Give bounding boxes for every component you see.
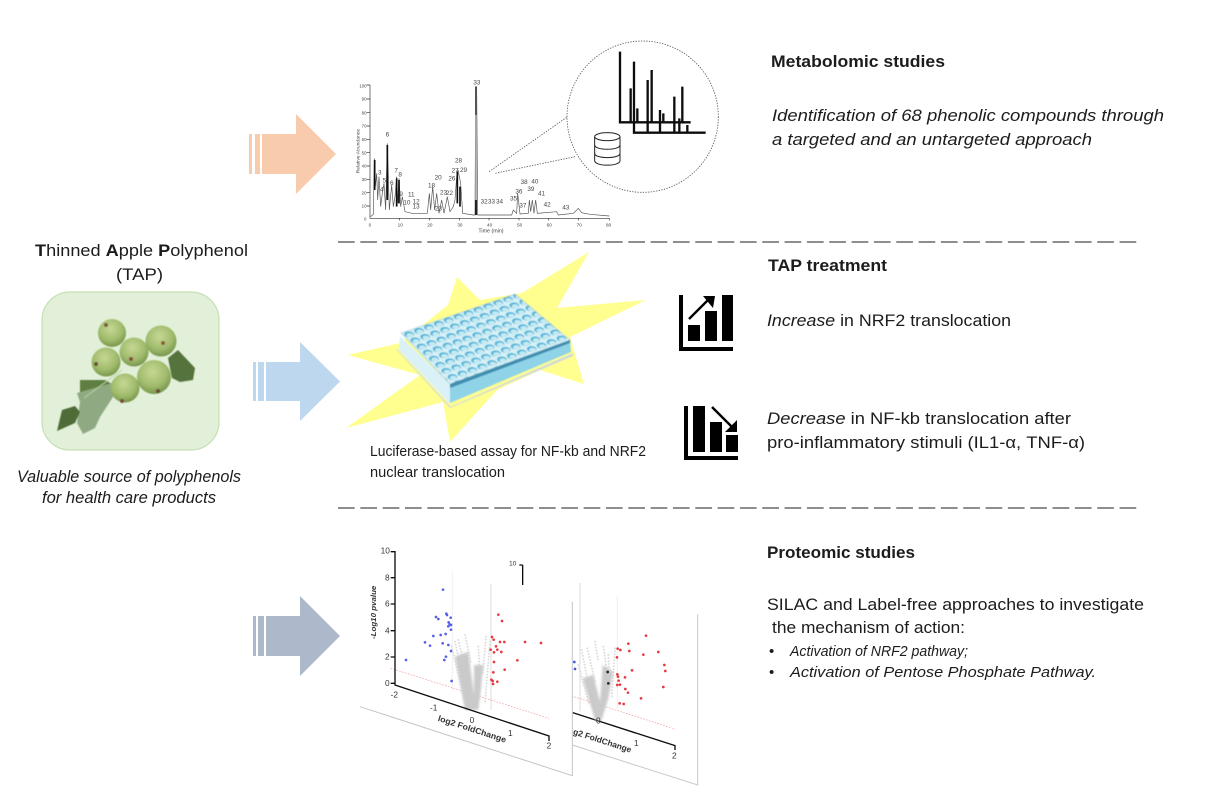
caption: valuable source: for health care products <box>42 489 216 507</box>
chart: front volcano plot: 8 <box>385 572 390 582</box>
chart: chromatogram: 12 <box>413 198 420 205</box>
chart: chromatogram: 20 <box>427 223 433 228</box>
text: TAP treatment: pro-inflammatory stimuli (IL1-α, TNF-α) <box>767 434 1085 452</box>
chart: chromatogram: Relative Abundance <box>355 129 361 173</box>
chart: chromatogram: 13 <box>413 204 420 211</box>
chart: chromatogram: 9 <box>399 191 403 198</box>
icon: yellow burst <box>346 252 646 442</box>
chart: chromatogram: 50 <box>517 223 523 228</box>
chart: front volcano plot: 2 <box>385 652 390 662</box>
chart: chromatogram: 33 <box>473 79 481 86</box>
text: proteomic studies: • <box>769 664 774 681</box>
chart: chromatogram: 28 <box>455 157 463 164</box>
chart: chromatogram: 7 <box>394 168 398 175</box>
caption: valuable source: Valuable source of polyphenols <box>17 468 241 486</box>
chart: front volcano plot: 2 <box>547 740 552 750</box>
caption: luciferase assay: Luciferase-based assay for NF-kb and NRF2 <box>370 443 646 460</box>
chart: chromatogram: 70 <box>362 124 367 129</box>
chart: chromatogram: 80 <box>362 110 367 115</box>
chart: front volcano plot: 4 <box>385 625 390 635</box>
chart: front volcano plot: -2 <box>391 690 398 700</box>
chart: chromatogram: 0 <box>369 223 372 228</box>
text: proteomic studies: • <box>769 643 774 660</box>
chart: chromatogram: 23 <box>440 190 448 197</box>
chart: chromatogram: 35 <box>510 196 518 203</box>
chart: chromatogram: 10 <box>362 204 367 209</box>
text: proteomic studies: SILAC and Label-free approaches to investigate <box>767 596 1144 614</box>
chart: front volcano plot <box>360 535 572 776</box>
divider top <box>338 241 1137 243</box>
icon: database <box>595 133 620 165</box>
chart: chromatogram: 33 <box>488 199 496 206</box>
icon: falling bar chart <box>684 406 738 460</box>
text: proteomic studies <box>767 544 1144 681</box>
chart: chromatogram: 4 <box>380 186 384 193</box>
chart: chromatogram: 6 <box>386 131 390 138</box>
chart: back volcano plot: 10 <box>509 561 517 568</box>
chart: chromatogram: 100 <box>359 83 367 88</box>
chart: chromatogram: 50 <box>362 150 367 155</box>
icon: rising bar chart <box>679 295 733 351</box>
chart: chromatogram: Time (min) <box>478 229 504 235</box>
chart: chromatogram: 39 <box>527 186 535 193</box>
chart: front volcano plot: 6 <box>385 599 390 609</box>
chart: chromatogram: 3 <box>378 170 382 177</box>
arrow: orange <box>249 114 336 194</box>
text: proteomic studies: Proteomic studies <box>767 544 915 562</box>
text: metabolomic studies: Identification of 68 phenolic compounds through <box>772 107 1164 125</box>
chart: chromatogram: 40 <box>531 178 539 185</box>
chart: chromatogram: 20 <box>362 190 367 195</box>
chart: chromatogram: 34 <box>496 199 504 206</box>
text: TAP treatment: TAP treatment <box>768 257 888 275</box>
chart: chromatogram: 6 <box>390 180 394 187</box>
icon: apple cluster <box>57 319 195 434</box>
chart: chromatogram: 0 <box>364 217 367 222</box>
chart: chromatogram: 29 <box>460 167 468 174</box>
chart: chromatogram: 42 <box>544 202 551 209</box>
chart: chromatogram: 40 <box>487 223 493 228</box>
chart: chromatogram: 11 <box>408 191 415 198</box>
chart: chromatogram: 22 <box>446 190 454 197</box>
chart: front volcano plot: 0 <box>385 678 390 688</box>
text: TAP treatment: Increase in NRF2 translocation <box>767 312 1011 330</box>
text: TAP treatment: Decrease in NF-kb translocation after <box>767 410 1072 428</box>
divider bottom <box>338 507 1137 509</box>
heading: Thinned Apple Polyphenol <box>35 242 248 284</box>
chart: back volcano plot <box>509 561 698 785</box>
text: metabolomic studies <box>771 53 1164 149</box>
icon: magnified circle <box>489 41 718 192</box>
caption: luciferase assay <box>370 443 646 481</box>
chart: chromatogram: 60 <box>547 223 552 228</box>
chart: chromatogram: 36 <box>515 188 523 195</box>
chart: chromatogram: 30 <box>457 223 463 228</box>
chart: back volcano plot: g2 FoldChange <box>572 726 633 755</box>
chart: chromatogram: 70 <box>577 223 582 228</box>
chart: chromatogram: 10 <box>398 223 403 228</box>
chart: back volcano plot: 2 <box>672 751 677 761</box>
chart: chromatogram: 32 <box>481 199 488 206</box>
chart: chromatogram: 80 <box>606 223 612 228</box>
chart: back volcano plot: 1 <box>634 738 639 748</box>
chart: chromatogram: 43 <box>562 204 570 211</box>
chart: front volcano plot: 10 <box>381 546 390 556</box>
chart: chromatogram: 60 <box>362 137 367 142</box>
chart: front volcano plot: log2 FoldChange <box>437 713 508 745</box>
arrow: navy <box>253 596 340 676</box>
chart: chromatogram: 40 <box>362 164 367 169</box>
chart: chromatogram: 27 <box>452 167 459 174</box>
chart: chromatogram <box>355 79 612 235</box>
chart: chromatogram: 41 <box>538 191 546 198</box>
chart: front volcano plot: 0 <box>470 715 475 725</box>
chart: back volcano plot: 0 <box>596 716 601 726</box>
chart: chromatogram: 90 <box>362 97 367 102</box>
panel: apple photo <box>42 292 219 450</box>
chart: front volcano plot: -1 <box>430 702 438 712</box>
text: TAP treatment <box>767 257 1085 452</box>
text: metabolomic studies: Metabolomic studies <box>771 53 945 71</box>
chart: chromatogram: 23 <box>435 206 443 213</box>
text: proteomic studies: Activation of Pentose Phosphate Pathway. <box>789 664 1096 681</box>
text: proteomic studies: Activation of NRF2 pathway; <box>789 643 968 660</box>
heading: Thinned Apple Polyphenol: Thinned Apple Polyphenol <box>35 242 248 260</box>
heading: Thinned Apple Polyphenol: (TAP) <box>116 266 163 284</box>
chart: front volcano plot: 1 <box>508 728 513 738</box>
chart: chromatogram: 20 <box>435 174 442 181</box>
chart: chromatogram: 30 <box>362 177 367 182</box>
text: proteomic studies: the mechanism of action: <box>772 619 965 637</box>
chart: chromatogram: 26 <box>448 175 456 182</box>
chart: chromatogram: 8 <box>398 172 402 179</box>
text: metabolomic studies: a targeted and an untargeted approach <box>772 131 1092 149</box>
chart: chromatogram: 5 <box>383 177 387 184</box>
caption: luciferase assay: nuclear translocation <box>370 464 505 481</box>
chart: chromatogram: 38 <box>521 179 528 186</box>
chart: front volcano plot: -Log10 pvalue <box>369 585 378 639</box>
arrow: blue <box>253 342 340 421</box>
chart: chromatogram: 18 <box>428 183 436 190</box>
chart: chromatogram: 10 <box>403 200 411 207</box>
chart: chromatogram: 37 <box>519 203 527 210</box>
caption: valuable source <box>17 468 241 507</box>
icon: well plate <box>396 294 573 408</box>
